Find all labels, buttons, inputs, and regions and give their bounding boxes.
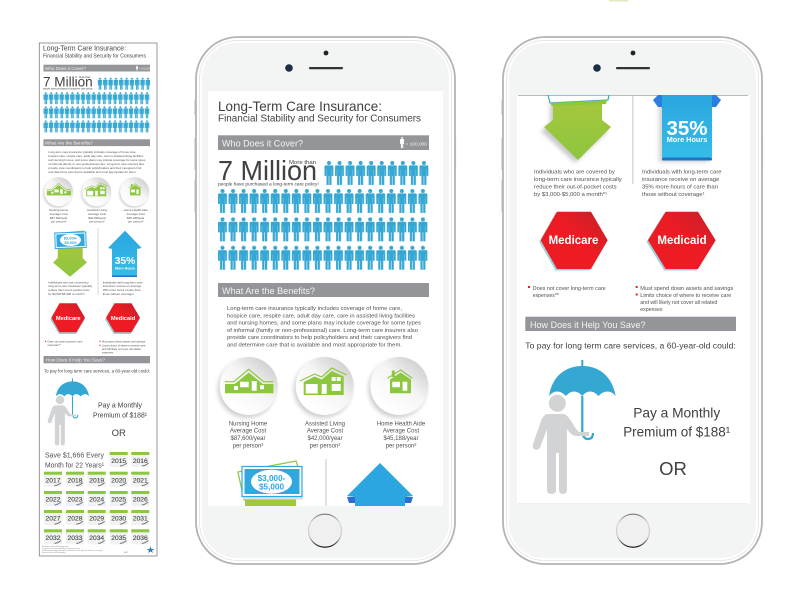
- calendars: 2015 to 2036: 2034: [89, 535, 104, 542]
- heading bar: who does it cover: [218, 135, 429, 150]
- text block: benefits paragraph thumbnail: and determine care that is available and most appropriate for them.: [48, 170, 137, 174]
- text: thumbnail premium: Pay a Monthly: [98, 403, 143, 410]
- text block: thumbnail outcomes: long-term care insurance typically: [48, 284, 93, 288]
- text: pay a monthly premium: Premium of $188¹: [623, 425, 731, 440]
- text: or: OR: [659, 458, 687, 479]
- text block: more hours of care: Individuals with long-term care: [642, 169, 722, 175]
- caption: assisted living cost: Assisted Living: [305, 421, 345, 427]
- calendars: 2015 to 2036: 2015: [111, 458, 126, 465]
- footnotes: thumbnail: AHIP: [124, 551, 129, 554]
- text block: out of pocket reduction: long-term care insurance typically: [534, 177, 622, 183]
- footnotes: thumbnail: Long-term care cost estimates per person per year: [42, 547, 80, 550]
- icon: nursing home: [218, 357, 278, 418]
- icon: medicaid hexagon: Medicaid: [657, 235, 707, 247]
- caption: nursing home cost: [229, 421, 268, 449]
- text block: thumbnail outcomes: by $3,000-$5,000 a month*¹: [48, 292, 85, 296]
- caption: nursing home cost: per person²: [233, 443, 263, 449]
- icon: home health aide: [368, 357, 428, 418]
- captions: thumbnail costs: $42,000/year: [88, 216, 106, 220]
- footnotes: thumbnail: [42, 545, 129, 554]
- footnotes: thumbnail: References and methodology notes: [42, 545, 69, 548]
- icon: medicaid hexagon: [646, 212, 716, 270]
- icon: thumbnail medicaid hexagon: Medicaid: [111, 316, 136, 322]
- calendars: 2015 to 2036: 2023: [68, 497, 83, 504]
- title: [218, 102, 421, 124]
- caption: nursing home cost: Average Cost: [230, 429, 266, 435]
- icons: thumbnail houses: [43, 177, 149, 208]
- icon: blue arrow with 35 percent: 35%: [666, 117, 708, 140]
- icon: money and green arrow top: $3,000-: [258, 474, 286, 483]
- heading bar: how does it help you save: How Does it Help You Save?: [530, 320, 646, 330]
- pictogram: thumbnail people: [44, 78, 150, 133]
- icon: thumbnail green arrow with money: [53, 230, 87, 277]
- text block: benefits paragraph: provide care coordinators to help policyholders and their caregivers find: [227, 335, 412, 341]
- calendars: 2015 to 2036: 2021: [133, 477, 148, 484]
- calendars: 2015 to 2036: 2024: [89, 497, 104, 504]
- heading bar: what are the benefits: What Are the Benefits?: [222, 286, 315, 296]
- text: savings intro: To pay for long term care services, a 60-year-old could:: [525, 340, 736, 350]
- captions: thumbnail costs: Average Cost: [88, 212, 106, 216]
- text block: thumbnail outcomes: those without coverage¹: [103, 292, 134, 296]
- panel: full infographic thumbnail: [39, 43, 157, 556]
- icon: right camera: [593, 64, 601, 72]
- captions: thumbnail costs: per person²: [51, 220, 66, 224]
- list: thumbnail limitations: Must spend down assets and savings: [102, 340, 146, 344]
- calendars: 2015 to 2036: 2031: [133, 516, 148, 523]
- stat: 7 million thumbnail: 7 Million: [43, 75, 93, 90]
- captions: thumbnail costs: $45,188/year: [127, 216, 144, 220]
- list: medicare limitations: Does not cover long-term care: [533, 286, 606, 292]
- text block: more hours of care: [642, 169, 722, 198]
- calendars: 2015 to 2036: 2017: [46, 477, 61, 484]
- text: thumbnail premium: Premium of $188¹: [93, 412, 148, 419]
- captions: thumbnail costs: per person²: [89, 220, 105, 224]
- text block: more hours of care: insurance receive on average: [642, 177, 720, 183]
- calendars: 2015 to 2036: 2033: [68, 535, 83, 542]
- caption: home health aide cost: $45,188/year: [383, 436, 419, 442]
- calendars: 2015 to 2036: 2020: [111, 477, 126, 484]
- captions: thumbnail costs: per person²: [128, 220, 143, 224]
- screen: left page: [208, 91, 443, 508]
- heading bar: save thumbnail: How Does it Help You Save?: [46, 358, 105, 363]
- text block: benefits paragraph thumbnail: provide care coordinators to help policyholders and their caregivers find: [48, 166, 142, 170]
- text block: out of pocket reduction: by $3,000-$5,000 a month*¹: [534, 192, 607, 198]
- text block: thumbnail outcomes: insurance receive on average: [103, 284, 142, 288]
- captions: thumbnail costs: Average Cost: [50, 212, 68, 216]
- icon: thumbnail medicare hexagon: [50, 303, 85, 334]
- calendars: 2015 to 2036: 2016: [133, 458, 148, 465]
- icon: left camera: [285, 64, 293, 72]
- phone: left device: [195, 37, 456, 564]
- stat: 7 million: 7 Million: [218, 155, 317, 186]
- text block: out of pocket reduction: [534, 169, 622, 198]
- icon: left speaker: [309, 67, 343, 69]
- caption: home health aide cost: Average Cost: [383, 429, 419, 435]
- text: thumbnail savings: Save $1,666 Every: [45, 452, 105, 459]
- title: thumbnail: Long-Term Care Insurance:: [43, 46, 126, 53]
- calendars: 2015 to 2036: 2025: [111, 497, 126, 504]
- calendars: 2015 to 2036: 2022: [46, 497, 61, 504]
- calendars: 2015 to 2036: 2027: [46, 516, 61, 523]
- icon: right sensor: [631, 51, 635, 55]
- text block: benefits paragraph: and nursing homes, and some plans may include coverage for some types: [227, 321, 421, 327]
- heading bar: what are the benefits: [218, 283, 429, 297]
- list: medicare limitations: expenses**: [533, 293, 559, 299]
- text: thumbnail premium: [93, 403, 148, 439]
- text: thumbnail savings: [45, 452, 105, 469]
- footnotes: thumbnail: Sources listed in full infographic: [42, 551, 66, 554]
- icon: assisted living: [294, 357, 354, 418]
- heading bar: who does it cover: = 100,000: [406, 142, 427, 148]
- text block: benefits paragraph: of informal (family or non-professional) care. Long-term care insurers also: [227, 328, 418, 334]
- text: pay a monthly premium: [624, 408, 730, 438]
- caption: assisted living cost: [305, 421, 345, 449]
- text block: benefits paragraph thumbnail: hospice care, respite care, adult day care, care in assisted living facilities: [48, 154, 144, 158]
- heading bar: save thumbnail: [44, 356, 150, 363]
- calendars: 2015 to 2036: [44, 452, 150, 545]
- list: medicare limitations: [528, 286, 606, 299]
- calendars: 2015 to 2036: 2036: [133, 535, 148, 542]
- calendars: 2015 to 2036: 2019: [89, 477, 104, 484]
- stat: 7 million thumbnail: More than: [79, 76, 91, 79]
- caption: assisted living cost: $42,000/year: [307, 436, 343, 442]
- icon: right home button: [616, 514, 650, 547]
- captions: thumbnail costs: Average Cost: [127, 212, 145, 216]
- text block: thumbnail outcomes: reduce their out-of-pocket costs: [48, 288, 90, 292]
- text block: thumbnail outcomes: 35% more hours of care than: [103, 288, 141, 292]
- heading bar: benefits thumbnail: [44, 139, 150, 146]
- title: thumbnail: [43, 46, 147, 59]
- icon: thumbnail blue arrow: More Hours: [115, 266, 135, 270]
- title: Financial Stability and Security for Consumers: [218, 114, 421, 125]
- text block: benefits paragraph thumbnail: and nursing homes, and some plans may include coverage for some types: [48, 158, 146, 162]
- caption: home health aide cost: Home Health Aide: [377, 421, 426, 427]
- icon: thumbnail blue arrow: 35%: [115, 256, 135, 267]
- icon: money and green arrow top: [238, 461, 303, 508]
- calendars: 2015 to 2036: 2030: [111, 516, 126, 523]
- icon: left home button: [308, 514, 342, 547]
- title: thumbnail: Financial Stability and Security for Consumers: [43, 53, 147, 59]
- caption: nursing home cost: $87,600/year: [230, 436, 266, 442]
- heading bar: who does it cover thumbnail: [44, 65, 150, 72]
- text block: benefits paragraph thumbnail: of informal (family or non-professional) care. Long-term care insurers also: [48, 162, 145, 166]
- text block: benefits paragraph thumbnail: [48, 150, 146, 174]
- calendars: 2015 to 2036: 2032: [46, 535, 61, 542]
- caption: assisted living cost: per person²: [310, 443, 340, 449]
- stat: 7 million: people have purchased a long-term care policy¹: [218, 182, 319, 186]
- list: thumbnail limitations: Limits choice of where to receive care: [102, 344, 146, 348]
- list: medicaid limitations: Must spend down assets and savings: [640, 286, 734, 292]
- text block: thumbnail outcomes: Individuals who are covered by: [48, 280, 89, 284]
- icon: thumbnail medicaid hexagon: [105, 303, 140, 334]
- stat: 7 million thumbnail: people have purchased a long-term care policy¹: [43, 88, 93, 90]
- text block: out of pocket reduction: Individuals who are covered by: [534, 169, 615, 175]
- icon: thumbnail blue arrow: [108, 231, 142, 277]
- calendars: 2015 to 2036: 2035: [111, 535, 126, 542]
- screen: right page: [517, 95, 750, 504]
- icon: thumbnail logo: [146, 546, 154, 553]
- heading bar: who does it cover thumbnail: Who Does it Cover?: [45, 66, 86, 71]
- captions: thumbnail costs: Assisted Living: [87, 208, 107, 212]
- calendars: 2015 to 2036: 2018: [68, 477, 83, 484]
- phone: right device: [502, 37, 762, 564]
- list: medicaid limitations: expenses: [640, 307, 663, 313]
- heading bar: benefits thumbnail: What Are the Benefits?: [45, 140, 93, 146]
- calendars: 2015 to 2036: 2026: [133, 497, 148, 504]
- title: Long-Term Care Insurance:: [218, 98, 382, 114]
- text: pay a monthly premium: Pay a Monthly: [633, 406, 720, 421]
- icon: medicare hexagon: [539, 212, 608, 270]
- captions: thumbnail costs: $87,600/year: [50, 216, 67, 220]
- text block: thumbnail outcomes: Individuals with long-term care: [103, 280, 143, 284]
- captions: thumbnail costs: Nursing Home: [49, 208, 69, 212]
- heading bar: who does it cover thumbnail: = 100,000: [139, 68, 150, 70]
- icon: right speaker: [616, 67, 650, 69]
- stat: 7 million: More than: [289, 160, 316, 166]
- icon: money and green arrow top: $5,000: [259, 482, 284, 491]
- text block: more hours of care: those without coverage¹: [642, 192, 705, 198]
- icon: thumbnail person with umbrella: [48, 378, 89, 445]
- text block: thumbnail outcomes: [48, 280, 143, 296]
- icon: blue arrow with 35 percent: [653, 95, 721, 162]
- icon: person with umbrella: [533, 360, 616, 494]
- captions: thumbnail costs: [49, 208, 148, 224]
- icon: thumbnail green arrow with money: $5,000: [64, 240, 77, 245]
- text block: benefits paragraph: hospice care, respite care, adult day care, care in assisted living facilities: [227, 313, 415, 319]
- icon: green arrow: [541, 95, 611, 163]
- text: thumbnail intro: To pay for long term care services, a 60-year-old could:: [44, 368, 150, 373]
- text block: benefits paragraph thumbnail: Long-term care insurance typically includes coverage of home care,: [48, 150, 137, 154]
- text block: more hours of care: 35% more hours of care than: [642, 184, 718, 190]
- text block: benefits paragraph: [227, 306, 421, 348]
- heading bar: how does it help you save: [525, 317, 736, 331]
- pictogram: people, each equals 100,000: [218, 161, 430, 270]
- icon: medicare hexagon: Medicare: [549, 235, 598, 247]
- captions: thumbnail costs: Home Health Aide: [124, 208, 148, 212]
- icon: thumbnail medicare hexagon: Medicare: [56, 316, 81, 322]
- list: thumbnail limitations: Does not cover long-term care: [48, 340, 83, 344]
- list: thumbnail limitations: and will likely not cover all related: [102, 347, 141, 351]
- caption: home health aide cost: per person²: [386, 443, 416, 449]
- text: thumbnail premium: OR: [112, 428, 126, 439]
- text block: benefits paragraph: and determine care that is available and most appropriate for them.: [227, 342, 402, 348]
- icon: blue arrow top: [347, 463, 413, 508]
- heading bar: who does it cover: Who Does it Cover?: [222, 138, 303, 148]
- list: medicaid limitations: [636, 286, 734, 313]
- calendars: 2015 to 2036: 2029: [89, 516, 104, 523]
- icon: blue arrow with 35 percent: More Hours: [667, 135, 707, 144]
- text block: benefits paragraph: Long-term care insurance typically includes coverage of home care,: [227, 306, 402, 312]
- calendars: 2015 to 2036: 2028: [68, 516, 83, 523]
- text block: out of pocket reduction: reduce their out-of-pocket costs: [534, 184, 617, 190]
- list: thumbnail limitations: expenses: [102, 352, 114, 355]
- caption: assisted living cost: Average Cost: [307, 429, 343, 435]
- list: medicaid limitations: and will likely not cover all related: [640, 300, 717, 306]
- caption: home health aide cost: [377, 421, 426, 449]
- icon: left sensor: [324, 51, 328, 55]
- list: medicaid limitations: Limits choice of where to receive care: [640, 293, 731, 299]
- list: thumbnail limitations: [45, 340, 146, 355]
- footnotes: thumbnail: Premium and savings estimates are illustrative; see policy for details of coverage: [42, 549, 102, 552]
- list: thumbnail limitations: expenses**: [48, 343, 61, 347]
- icon: thumbnail green arrow with money: $3,000-: [64, 236, 78, 240]
- caption: nursing home cost: Nursing Home: [229, 421, 268, 427]
- text: thumbnail savings: Month for 22 Years¹: [45, 462, 105, 469]
